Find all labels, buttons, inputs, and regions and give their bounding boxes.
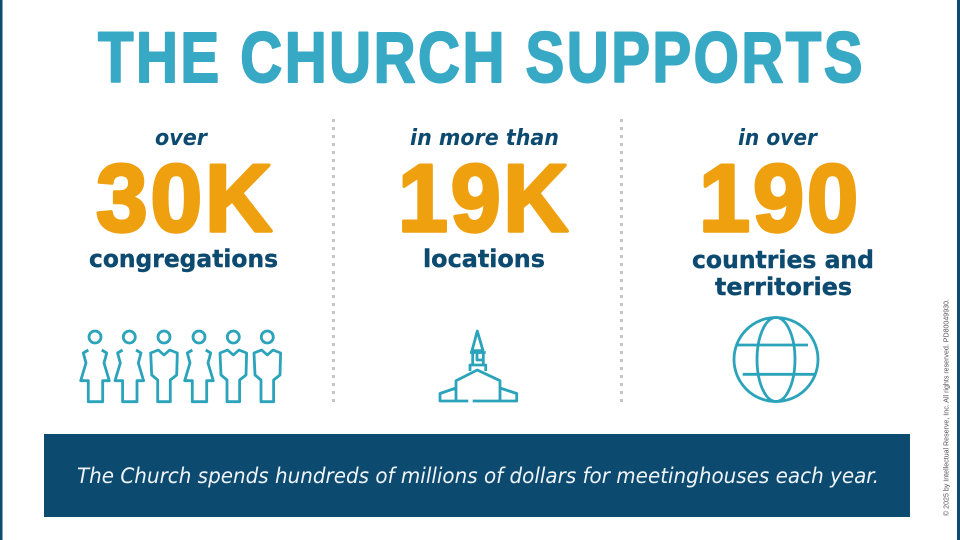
banner text: The Church spends hundreds of millions of dollars for meetinghouses each year. [77,464,879,488]
number: 19K: 19K [398,145,571,252]
icon: six people [81,331,281,402]
number: 30K: 30K [96,145,275,252]
label: countries and territories: territories [715,273,852,301]
panel: congregations [81,126,281,402]
number: 190: 190 [699,145,861,252]
copyright note: © 2025 by Intellectual Reserve, Inc. All rights reserved. PD80049930. [942,299,950,516]
lead-in: in over: in over [738,126,818,151]
label: congregations: congregations [89,245,278,273]
icon: globe [734,318,818,402]
lead-in: over: over [155,126,208,151]
callout banner [44,434,910,517]
panel: countries and territories [692,126,874,402]
label: countries and territories [692,246,874,301]
label: countries and territories: countries and [692,246,874,274]
icon: meetinghouse [440,331,517,401]
panel: locations [398,126,571,401]
label: locations: locations [423,245,545,273]
lead-in: in more than: in more than [410,126,559,151]
